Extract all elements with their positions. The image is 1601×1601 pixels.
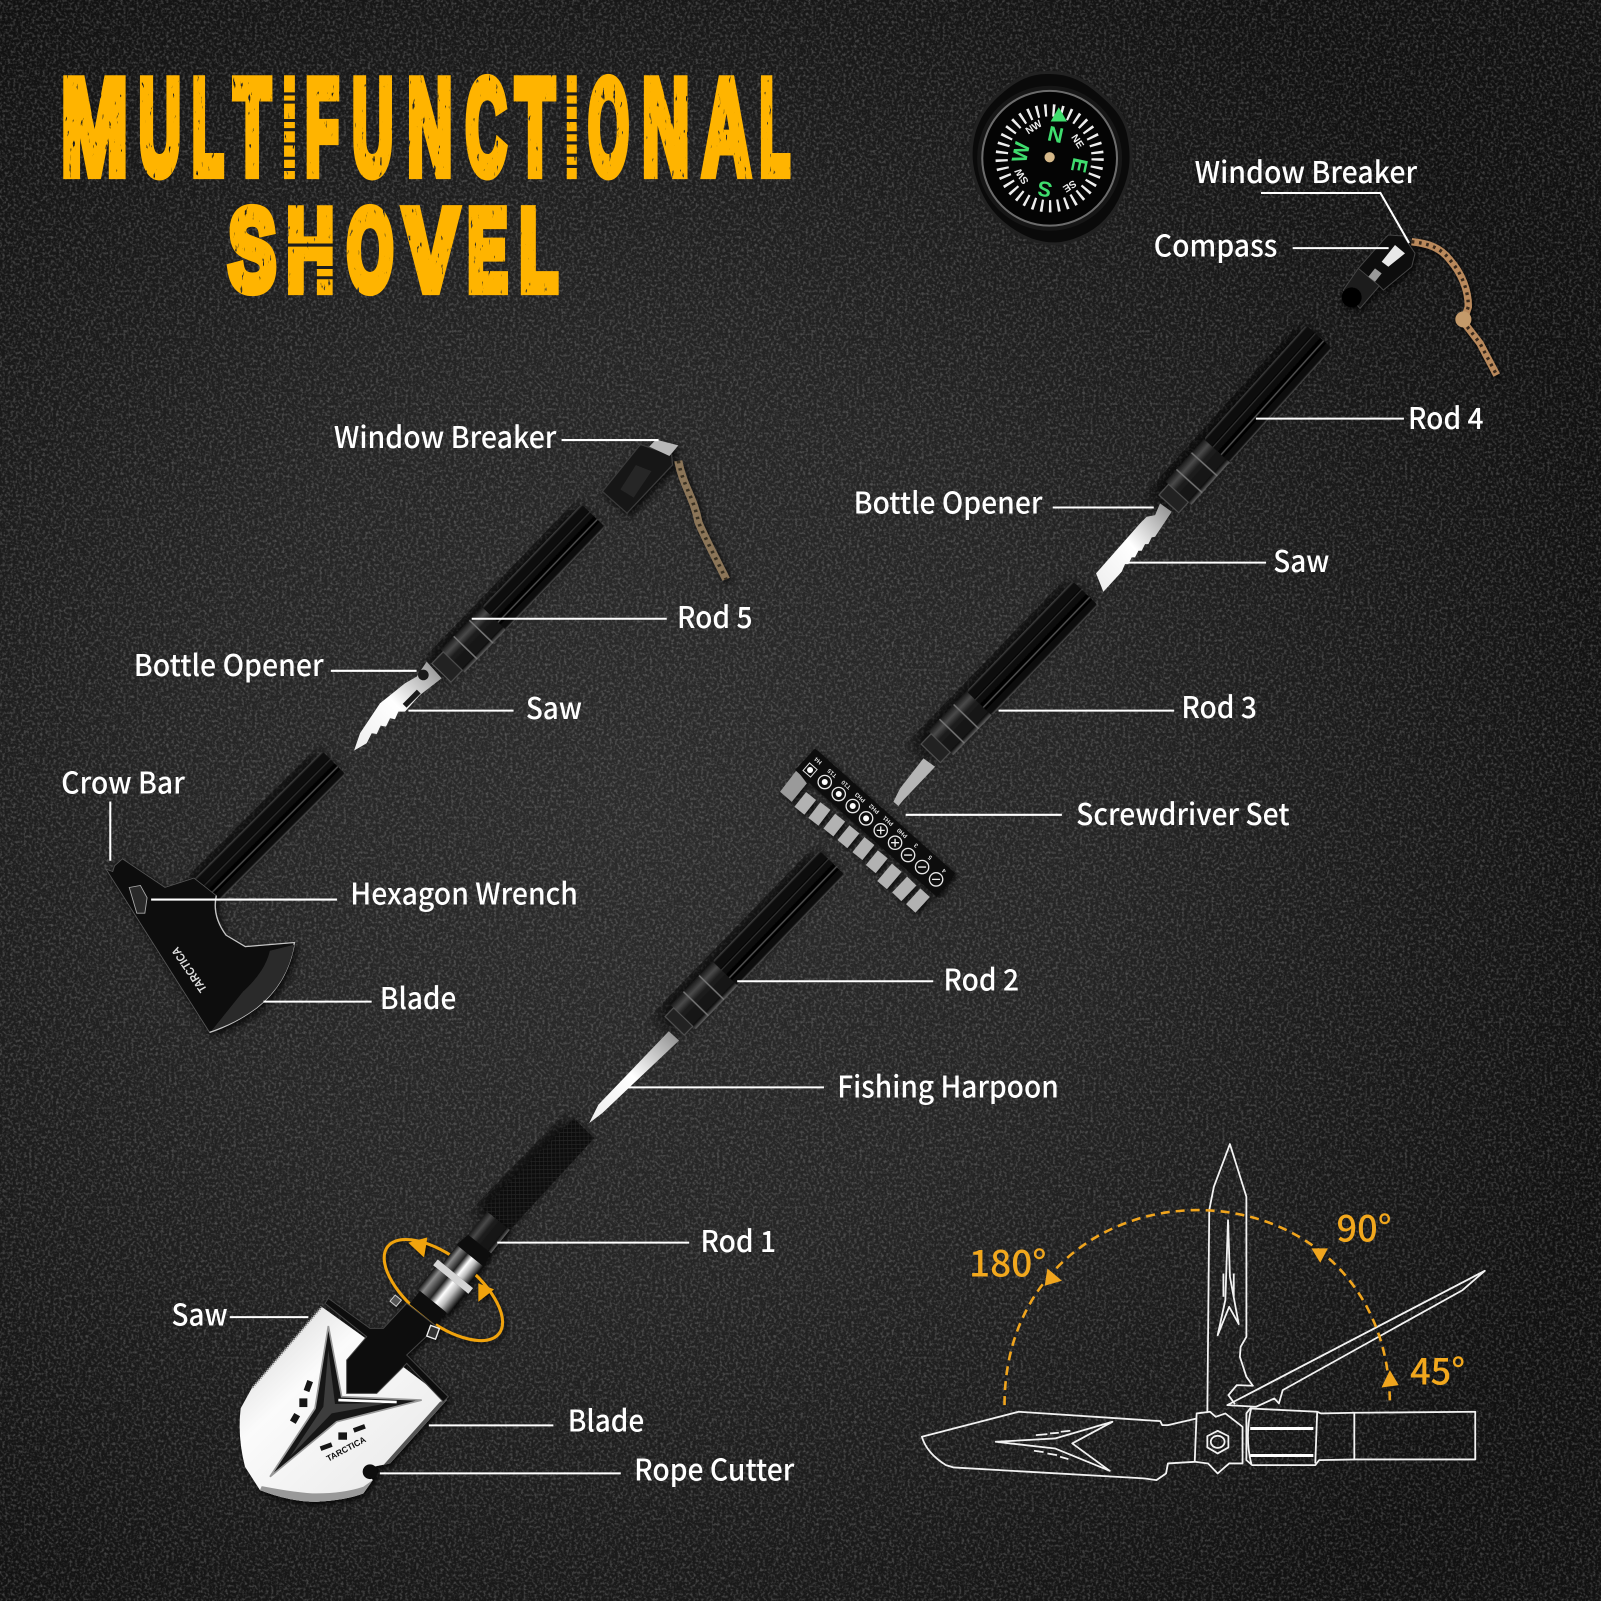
- title: A: [702, 52, 750, 203]
- screwdriver set: PH1: [882, 814, 895, 826]
- saw on rod 3: [1096, 503, 1172, 592]
- icon: shovel head: [240, 1206, 519, 1502]
- title: V: [404, 186, 457, 314]
- rod 3: [918, 581, 1098, 765]
- pivot: [1195, 1412, 1243, 1473]
- label: Saw right: Saw: [1273, 538, 1329, 581]
- label: Fishing Harpoon: Fishing Harpoon: [837, 1064, 1059, 1107]
- screwdriver set: T10: [840, 778, 853, 790]
- title: I: [283, 52, 296, 203]
- screwdriver set: 5: [927, 853, 934, 860]
- saw on rod 5: [354, 662, 442, 751]
- dashed rotation arc: [1005, 1210, 1390, 1405]
- 90 degree blade: [1207, 1144, 1253, 1412]
- screwdriver set: 4: [941, 866, 948, 874]
- rod 4: [1156, 325, 1332, 515]
- label: Rod 5: Rod 5: [677, 594, 753, 637]
- title: L: [192, 52, 224, 203]
- label: Crow Bar: Crow Bar: [61, 759, 186, 802]
- title: N: [407, 52, 452, 203]
- title: O: [347, 186, 393, 314]
- fishing harpoon: [589, 1031, 679, 1123]
- axe head: [106, 859, 294, 1032]
- icon: top cap with cord: [1342, 235, 1497, 375]
- icon: compass: N: [1045, 122, 1066, 148]
- rod 1 neck: [405, 1206, 516, 1329]
- screwdriver set: PH3: [854, 790, 867, 803]
- rotation arrow: [368, 1221, 519, 1359]
- label: Bottle Opener left: Bottle Opener: [134, 642, 325, 685]
- title: C: [466, 52, 506, 203]
- handle outline: [1246, 1408, 1475, 1465]
- label: Blade shovel: Blade: [568, 1398, 644, 1441]
- 45 degrees label: 45°: [1410, 1342, 1465, 1396]
- icon: compass: S: [1035, 176, 1054, 202]
- title: N: [642, 52, 689, 203]
- shovel star: [270, 1326, 422, 1477]
- rod 2: [662, 851, 845, 1038]
- title: I: [566, 52, 578, 203]
- rotation arrowheads: [1045, 1248, 1399, 1387]
- icon: compass: NE: [1068, 133, 1085, 151]
- icon: compass: [971, 72, 1131, 244]
- screwdriver set: [780, 748, 955, 908]
- label: Screwdriver Set: Screwdriver Set: [1076, 791, 1290, 834]
- label: Crow Bar: [61, 759, 186, 861]
- label: Hexagon Wrench: Hexagon Wrench: [350, 871, 578, 914]
- screwdriver set: 3: [913, 841, 920, 848]
- title: T: [234, 52, 271, 203]
- icon: compass: NW: [1024, 118, 1045, 137]
- label: Saw shovel: Saw: [172, 1291, 228, 1334]
- text: L: [760, 52, 790, 203]
- icon: compass: W: [1007, 139, 1035, 165]
- title: T: [516, 52, 554, 203]
- title: L: [520, 186, 557, 314]
- label: Rod 4: Rod 4: [1408, 395, 1484, 438]
- icon: left cap with cord: [602, 440, 726, 579]
- shovel socket: [325, 1298, 448, 1402]
- label: Bottle Opener right: Bottle Opener: [854, 480, 1043, 523]
- 180 degree blade: [922, 1412, 1197, 1480]
- title: M: [61, 52, 128, 203]
- label: Window Breaker top: [1195, 149, 1418, 243]
- shovel brand logo: TARCTICA: [325, 1434, 368, 1463]
- title: E: [468, 186, 507, 314]
- label: Rope Cutter: Rope Cutter: [634, 1447, 795, 1490]
- folding angle diagram: [922, 1144, 1485, 1480]
- label: Rod 1: Rod 1: [700, 1218, 776, 1261]
- screwdriver tip on rod 3: [893, 758, 935, 806]
- title: H: [287, 186, 334, 314]
- label: Saw shovel: [172, 1291, 308, 1334]
- title: [61, 52, 790, 314]
- title: U: [352, 52, 393, 203]
- icon: compass: SE: [1060, 177, 1078, 194]
- screwdriver set: T15: [826, 766, 839, 778]
- label: Saw left: Saw: [526, 685, 582, 728]
- icon: compass: E: [1066, 156, 1092, 175]
- 45 degree blade: [1227, 1271, 1485, 1407]
- axe brand logo: TARCTICA: [169, 944, 210, 994]
- label: Rod 3: Rod 3: [1181, 684, 1257, 727]
- title: F: [305, 52, 339, 203]
- screwdriver set: H4: [813, 755, 824, 765]
- title: S: [229, 186, 276, 314]
- label: Rod 2: Rod 2: [943, 956, 1019, 999]
- screwdriver set: PH0: [896, 826, 909, 839]
- label: Compass: Compass: [1154, 222, 1277, 265]
- label: Blade axe: Blade: [380, 975, 456, 1018]
- icon: compass: SW: [1013, 166, 1031, 186]
- title: U: [139, 52, 181, 203]
- label: Window Breaker left: Window Breaker: [334, 414, 557, 457]
- axe handle: [194, 751, 345, 903]
- 90 degrees label: 90°: [1337, 1199, 1392, 1253]
- rod 1 knurled handle: [483, 1116, 597, 1232]
- title: O: [588, 52, 629, 203]
- label: Window Breaker top: Window Breaker: [1195, 149, 1418, 192]
- rod 5: [430, 504, 605, 684]
- 180 degrees label: 180°: [969, 1233, 1047, 1287]
- shovel blade: [240, 1307, 447, 1502]
- screwdriver set: PH2: [868, 802, 881, 814]
